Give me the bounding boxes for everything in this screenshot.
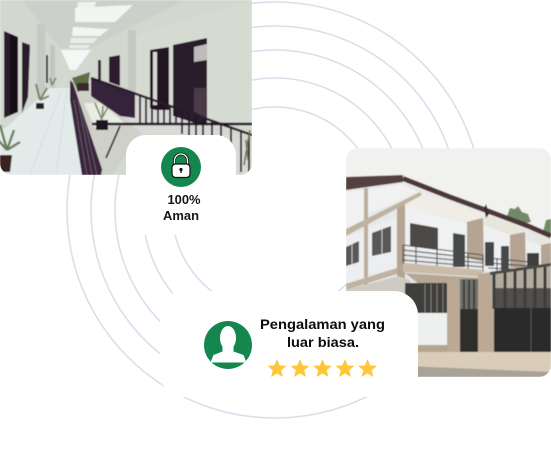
potted plants: [0, 125, 20, 150]
pillars and beams: [397, 204, 405, 290]
icon: padlock: [161, 147, 201, 187]
text: Aman: Aman: [163, 208, 199, 223]
near railing: [70, 80, 104, 175]
concentric arcs background: [67, 2, 483, 418]
photo: two-storey townhouses: [346, 148, 551, 377]
corridor floor behind far railing: [149, 108, 194, 124]
five star rating: [268, 359, 377, 377]
walls: [346, 182, 539, 283]
card: review: [160, 291, 418, 397]
balconies: [403, 245, 530, 272]
text: review heading line 2: luar biasa.: [287, 334, 359, 350]
windows and doors: [372, 226, 391, 256]
planter: [76, 88, 141, 175]
photo: apartment corridor: [0, 0, 252, 175]
icon: user avatar: [204, 321, 252, 369]
card: 100% safe: [126, 135, 236, 235]
text: 100%: 100%: [168, 192, 201, 207]
far railing: [91, 78, 135, 118]
roof: [346, 175, 403, 190]
fence and gate: [405, 283, 448, 315]
text: review heading: Pengalaman yang: [260, 316, 385, 332]
ground: [418, 351, 551, 372]
